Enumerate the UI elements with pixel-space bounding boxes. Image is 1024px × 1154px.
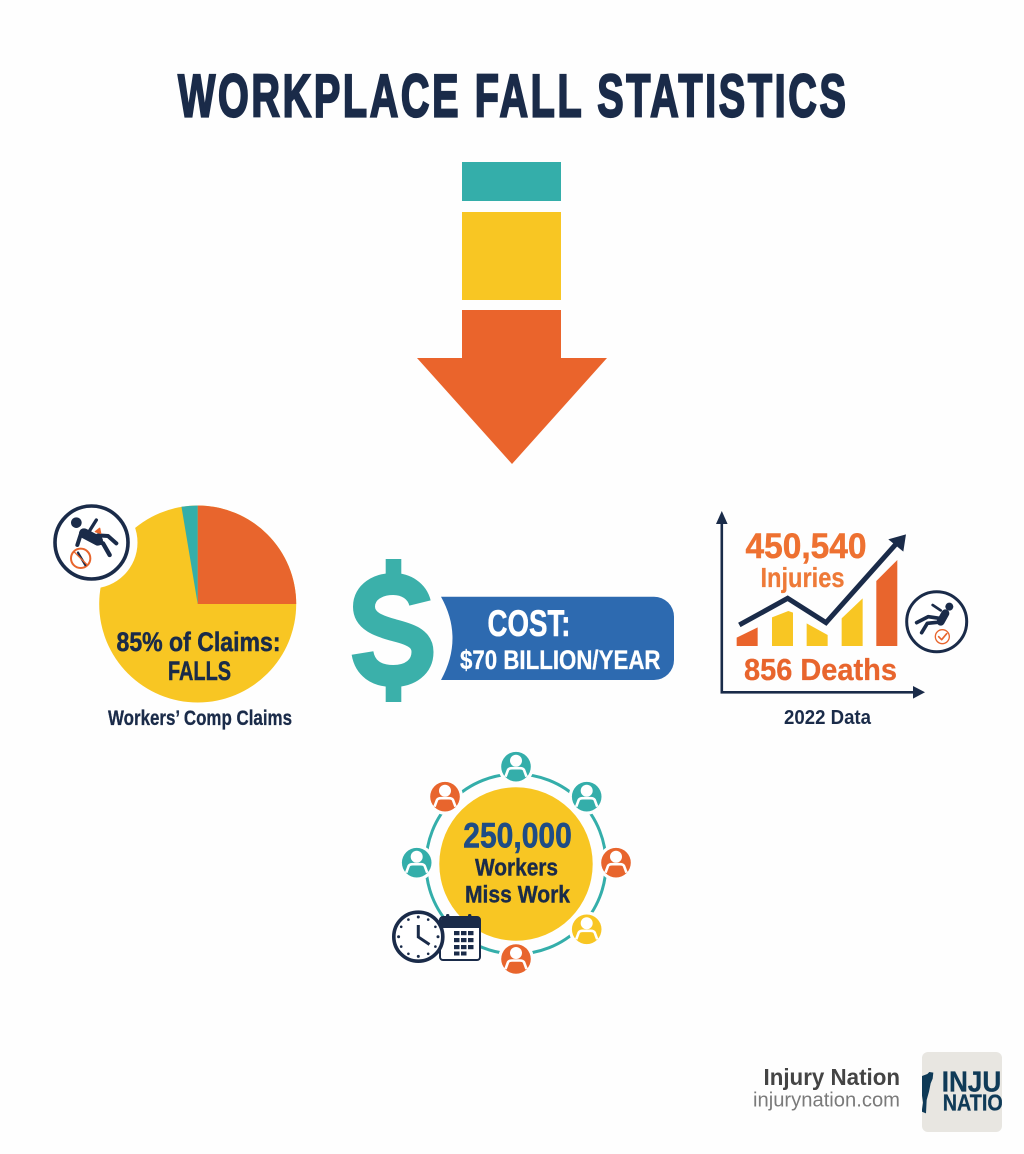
cost banner xyxy=(441,597,674,680)
worker icon: bottom xyxy=(498,941,534,977)
worker icon: top xyxy=(498,749,534,785)
missed work text: Workers xyxy=(475,854,558,882)
pie label: 85% of Claims: xyxy=(116,627,280,657)
worker icon: upper right xyxy=(569,779,605,815)
panel: 2022 injury data xyxy=(716,511,967,729)
icon: dollar sign xyxy=(362,559,422,702)
injuries figure: Injuries xyxy=(760,562,844,593)
cost text xyxy=(460,603,660,675)
ring of people xyxy=(399,749,634,977)
worker icon: upper left xyxy=(427,779,463,815)
central yellow circle xyxy=(439,787,593,941)
worker icon: right xyxy=(598,845,634,881)
bar chart xyxy=(737,560,897,646)
trend line arrow xyxy=(739,534,906,625)
panel: annual cost xyxy=(362,559,674,702)
pie chart xyxy=(99,505,296,702)
missed work text xyxy=(463,816,572,908)
icon: falling worker xyxy=(46,496,138,588)
injuries figure xyxy=(746,527,866,593)
footer brand text xyxy=(753,1064,900,1112)
missed work text: 250,000 xyxy=(463,816,572,856)
panel: workers missing work xyxy=(394,749,634,977)
worker icon: lower right xyxy=(569,911,605,947)
footer brand text: injurynation.com xyxy=(753,1090,900,1112)
icon: calendar xyxy=(440,914,480,960)
footer logo xyxy=(922,1052,1003,1132)
icon: clock xyxy=(394,912,443,961)
pie label xyxy=(116,627,280,686)
cost text: $70 BILLION/YEAR xyxy=(460,645,660,675)
footer brand text: Injury Nation xyxy=(764,1064,900,1090)
panel: workers' comp claims xyxy=(46,496,296,730)
title: WORKPLACE FALL STATISTICS xyxy=(178,62,846,129)
worker icon: left xyxy=(399,845,435,881)
deaths figure: 856 Deaths xyxy=(744,652,897,687)
missed work text: Miss Work xyxy=(465,882,571,908)
chart caption: 2022 Data xyxy=(784,707,872,729)
arrow: downward segmented arrow xyxy=(417,162,607,464)
cost text: COST: xyxy=(488,603,570,644)
injuries figure: 450,540 xyxy=(746,527,866,566)
pie caption: Workers’ Comp Claims xyxy=(108,707,292,730)
pie label: FALLS xyxy=(168,656,231,686)
icon: falling worker with check xyxy=(907,592,967,652)
chart axes xyxy=(716,511,925,699)
